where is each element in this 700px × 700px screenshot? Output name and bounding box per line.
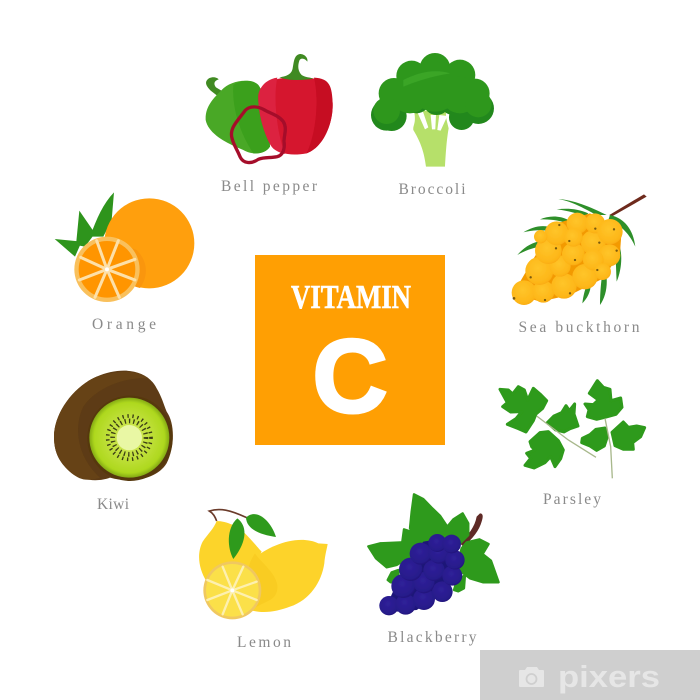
panel: vitamin C centre square	[255, 255, 445, 445]
icon: camera	[519, 667, 544, 687]
label: parsley: Parsley	[543, 491, 601, 508]
label: kiwi: Kiwi	[97, 496, 130, 513]
label: sea buckthorn: Sea buckthorn	[518, 319, 640, 336]
icon: parsley	[500, 381, 645, 478]
label: lemon: Lemon	[237, 634, 291, 651]
icon: lemon	[199, 510, 328, 619]
icon: orange	[55, 192, 194, 302]
label: blackberry: Blackberry	[388, 629, 477, 646]
label: bell pepper: Bell pepper	[221, 178, 318, 195]
label: broccoli: Broccoli	[398, 181, 466, 198]
icon: broccoli	[371, 53, 494, 167]
label: orange: Orange	[92, 316, 156, 333]
icon: sea buckthorn	[512, 194, 647, 305]
icon: kiwi	[54, 371, 173, 481]
text: pixers: pixers	[558, 659, 660, 694]
icon: blackberry	[368, 494, 499, 615]
watermark: pixers	[480, 650, 700, 700]
heading: letter C: C	[312, 319, 388, 435]
icon: bell pepper	[206, 54, 333, 163]
heading: vitamin: VITAMIN	[291, 279, 411, 316]
